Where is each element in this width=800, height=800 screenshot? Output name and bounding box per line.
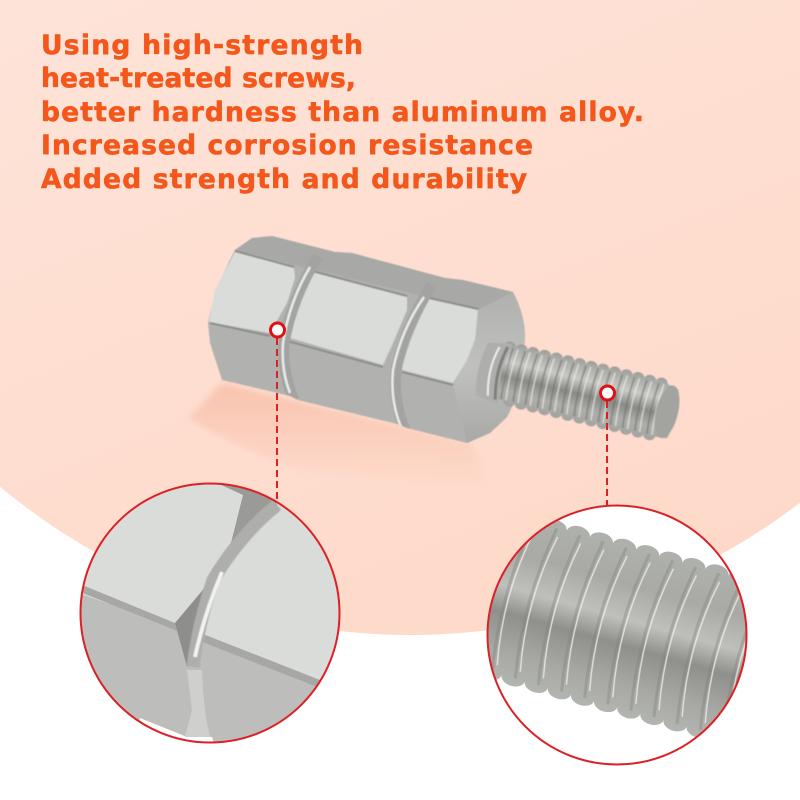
hex body silhouette [208,236,525,443]
lower hex face [82,594,316,742]
screw reflection [188,383,484,490]
dashed leader line: right [606,401,608,506]
headline text: Increased corrosion resistance [41,130,533,161]
background peach arc [0,0,800,635]
headline text: heat-treated screws, [41,63,356,94]
hex edge strip [83,586,320,686]
marker: thread [600,386,614,400]
threaded screw standoff illustration [208,236,685,445]
detail circle: hex groove close-up [70,483,340,760]
headline text: Added strength and durability [41,164,527,195]
hex end face [453,292,525,443]
pinch shadow [175,589,204,666]
hex grooves [283,256,432,430]
groove band [193,505,277,667]
groove highlight [195,572,222,657]
headline text: Using high-strength [41,30,363,61]
hex top facets [235,236,513,310]
lower groove [185,670,210,737]
detail circle: thread close-up [486,504,748,766]
white corner [140,718,214,742]
light hex faces [209,252,478,383]
dashed leader line: left [276,338,278,502]
threaded stud [471,336,685,445]
marker: hex groove [270,323,284,337]
top dark fan [222,485,277,543]
hex edge lines [210,251,478,385]
headline text: better hardness than aluminum alloy. [41,97,644,128]
headline text [41,30,644,195]
